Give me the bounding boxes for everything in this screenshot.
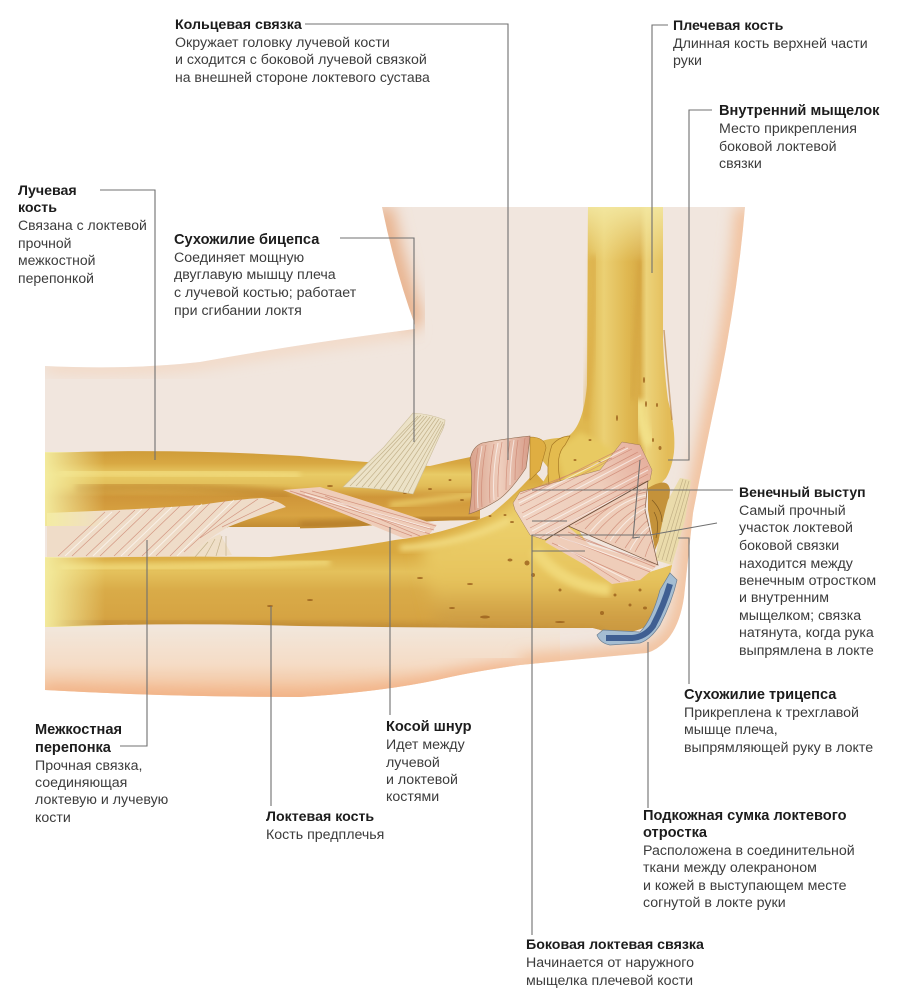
label: coronoid process: участок локтевой bbox=[739, 520, 853, 536]
label: coronoid process: Венечный выступ bbox=[739, 484, 866, 500]
label: annular ligament: на внешней стороне локтевого сустава bbox=[175, 69, 430, 85]
label: interosseous membrane: Межкостная bbox=[35, 722, 122, 738]
joint cartilage rings bbox=[530, 436, 670, 550]
label: interosseous membrane: перепонка bbox=[35, 740, 112, 756]
label: ulna: Локтевая кость bbox=[266, 809, 374, 825]
label: oblique cord: Косой шнур bbox=[386, 719, 472, 735]
label: medial epicondyle: боковой локтевой bbox=[719, 139, 837, 155]
ulna bone bbox=[45, 472, 680, 640]
label: annular ligament: Окружает головку лучевой кости bbox=[175, 35, 390, 51]
label: olecranon bursa: Расположена в соединительной bbox=[643, 843, 855, 859]
label: coronoid process: боковой связки bbox=[739, 538, 839, 554]
label: humerus: Плечевая кость bbox=[673, 18, 784, 34]
label: annular ligament: и сходится с боковой лучевой связкой bbox=[175, 52, 427, 68]
label: olecranon bursa: и кожей в выступающем месте bbox=[643, 878, 847, 894]
label: medial epicondyle: Внутренний мыщелок bbox=[719, 103, 880, 119]
label: interosseous membrane: соединяющая bbox=[35, 775, 127, 791]
label: annular ligament: Кольцевая связка bbox=[175, 17, 302, 33]
leader lines bbox=[100, 24, 733, 935]
label: humerus: Длинная кость верхней части bbox=[673, 36, 868, 52]
label: biceps tendon: Сухожилие бицепса bbox=[174, 232, 320, 248]
radius bone bbox=[45, 451, 480, 528]
label: coronoid process: и внутренним bbox=[739, 590, 829, 606]
label: radius: перепонкой bbox=[18, 270, 94, 286]
label: interosseous membrane: Прочная связка, bbox=[35, 758, 142, 774]
label: oblique cord: Идет между bbox=[386, 737, 466, 753]
label: biceps tendon: при сгибании локтя bbox=[174, 303, 302, 319]
label: humerus: руки bbox=[673, 53, 702, 69]
label: olecranon bursa: Подкожная сумка локтевого bbox=[643, 808, 847, 824]
label: radius: прочной bbox=[18, 235, 71, 251]
label: coronoid process: венечным отростком bbox=[739, 573, 876, 589]
label: triceps tendon: мышце плеча, bbox=[684, 722, 778, 738]
label: triceps tendon: Прикреплена к трехглавой bbox=[684, 705, 859, 721]
label: oblique cord: и локтевой bbox=[386, 772, 458, 788]
label: radius: межкостной bbox=[18, 252, 95, 268]
arm skin silhouette bbox=[45, 207, 745, 700]
label: triceps tendon: Сухожилие трицепса bbox=[684, 687, 837, 703]
label: interosseous membrane: кости bbox=[35, 810, 71, 826]
label: olecranon bursa: ткани между олекраноном bbox=[643, 860, 817, 876]
label: biceps tendon: Соединяет мощную bbox=[174, 250, 305, 266]
interosseous membrane bbox=[47, 498, 300, 558]
label: oblique cord: костями bbox=[386, 789, 439, 805]
label: ulnar collateral ligament: мыщелка плечевой кости bbox=[526, 973, 693, 989]
oblique cord bbox=[283, 487, 437, 538]
label: medial epicondyle: Место прикрепления bbox=[719, 121, 857, 137]
label: oblique cord: лучевой bbox=[386, 755, 440, 771]
label: medial epicondyle: связки bbox=[719, 156, 762, 172]
label: coronoid process: выпрямлена в локте bbox=[739, 643, 874, 659]
label: interosseous membrane: локтевую и лучевую bbox=[35, 792, 169, 808]
label: coronoid process: натянута, когда рука bbox=[739, 625, 874, 641]
label: biceps tendon: с лучевой костью; работает bbox=[174, 285, 357, 301]
label: radius: Связана с локтевой bbox=[18, 217, 147, 233]
label: ulnar collateral ligament: Боковая локтевая связка bbox=[526, 937, 704, 953]
biceps tendon bbox=[343, 413, 445, 494]
label: ulna: Кость предплечья bbox=[266, 827, 384, 843]
label: coronoid process: мыщелком; связка bbox=[739, 608, 861, 624]
label: biceps tendon: двуглавую мышцу плеча bbox=[174, 267, 336, 283]
left fade of bones bbox=[45, 452, 105, 627]
humerus bone bbox=[530, 207, 674, 505]
label: triceps tendon: выпрямляющей руку в локте bbox=[684, 740, 873, 756]
label: olecranon bursa: отростка bbox=[643, 825, 708, 841]
label: coronoid process: Самый прочный bbox=[739, 503, 846, 519]
label: radius: кость bbox=[18, 200, 57, 216]
label: olecranon bursa: согнутой в локте руки bbox=[643, 895, 786, 911]
collateral ligaments bbox=[513, 442, 658, 584]
label: coronoid process: находится между bbox=[739, 556, 854, 572]
triceps tendon bbox=[655, 478, 691, 565]
olecranon bursa bbox=[597, 573, 677, 645]
label: ulnar collateral ligament: Начинается от наружного bbox=[526, 955, 694, 971]
label: radius: Лучевая bbox=[18, 183, 77, 199]
annular ligament bbox=[469, 436, 530, 514]
